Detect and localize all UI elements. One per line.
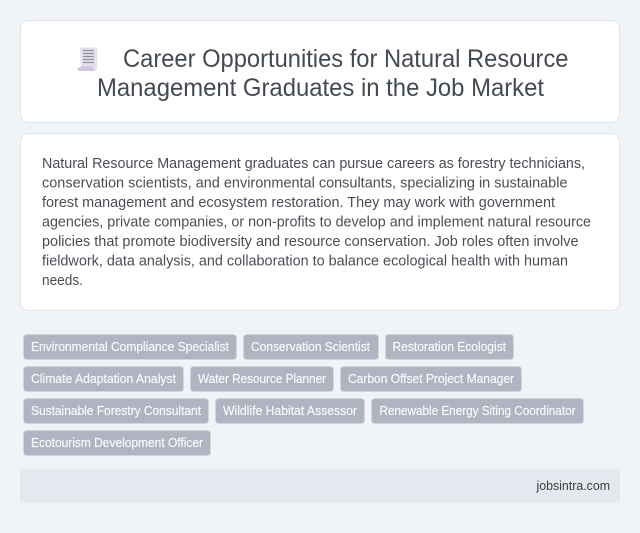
title: Management Graduates in the Job Market	[97, 74, 544, 102]
tag: Renewable Energy Siting Coordinator	[372, 398, 584, 424]
job role tags	[24, 334, 584, 456]
icon: paper scroll	[78, 48, 97, 71]
tag: Sustainable Forestry Consultant	[24, 398, 208, 424]
description text: needs.	[42, 272, 83, 289]
footer source text: jobsintra.com	[536, 479, 610, 493]
tag: Conservation Scientist	[244, 334, 378, 360]
tag: Sustainable Forestry Consultant: Sustainable Forestry Consultant	[31, 404, 201, 418]
panel: title card	[20, 20, 620, 122]
footer	[20, 469, 620, 502]
tag: Restoration Ecologist: Restoration Ecologist	[392, 340, 506, 354]
description text: agencies, private companies, or non-profits to develop and implement natural resource	[42, 214, 591, 230]
tag: Climate Adaptation Analyst: Climate Adaptation Analyst	[31, 372, 177, 386]
tag: Ecotourism Development Officer	[24, 430, 210, 456]
title	[97, 45, 568, 102]
tag: Carbon Offset Project Manager: Carbon Offset Project Manager	[348, 372, 514, 386]
tag: Restoration Ecologist	[386, 334, 514, 360]
panel: description	[20, 134, 620, 310]
description text: forest management and ecosystem restoration. They may work with government	[42, 194, 556, 211]
tag: Environmental Compliance Specialist	[24, 334, 236, 360]
tag: Water Resource Planner	[190, 366, 334, 392]
tag: Conservation Scientist: Conservation Scientist	[251, 340, 370, 354]
description text: Natural Resource Management graduates can pursue careers as forestry technicians,	[42, 155, 585, 172]
tag: Carbon Offset Project Manager	[340, 366, 522, 392]
tag: Ecotourism Development Officer: Ecotourism Development Officer	[31, 436, 203, 450]
description text: conservation scientists, and environmental consultants, specializing in sustainable	[42, 174, 568, 192]
description text	[42, 155, 591, 289]
tag: Environmental Compliance Specialist: Environmental Compliance Specialist	[31, 340, 229, 354]
tag: Water Resource Planner: Water Resource Planner	[198, 372, 326, 386]
description text: policies that promote biodiversity and resource conservation. Job roles often involve	[42, 233, 578, 250]
tag: Wildlife Habitat Assessor	[216, 398, 364, 424]
description text: fieldwork, data analysis, and collaboration to balance ecological health with human	[42, 252, 568, 270]
tag: Climate Adaptation Analyst	[24, 366, 184, 392]
title: Career Opportunities for Natural Resource	[123, 45, 568, 73]
tag: Wildlife Habitat Assessor: Wildlife Habitat Assessor	[223, 404, 357, 418]
tag: Renewable Energy Siting Coordinator: Renewable Energy Siting Coordinator	[380, 404, 576, 418]
